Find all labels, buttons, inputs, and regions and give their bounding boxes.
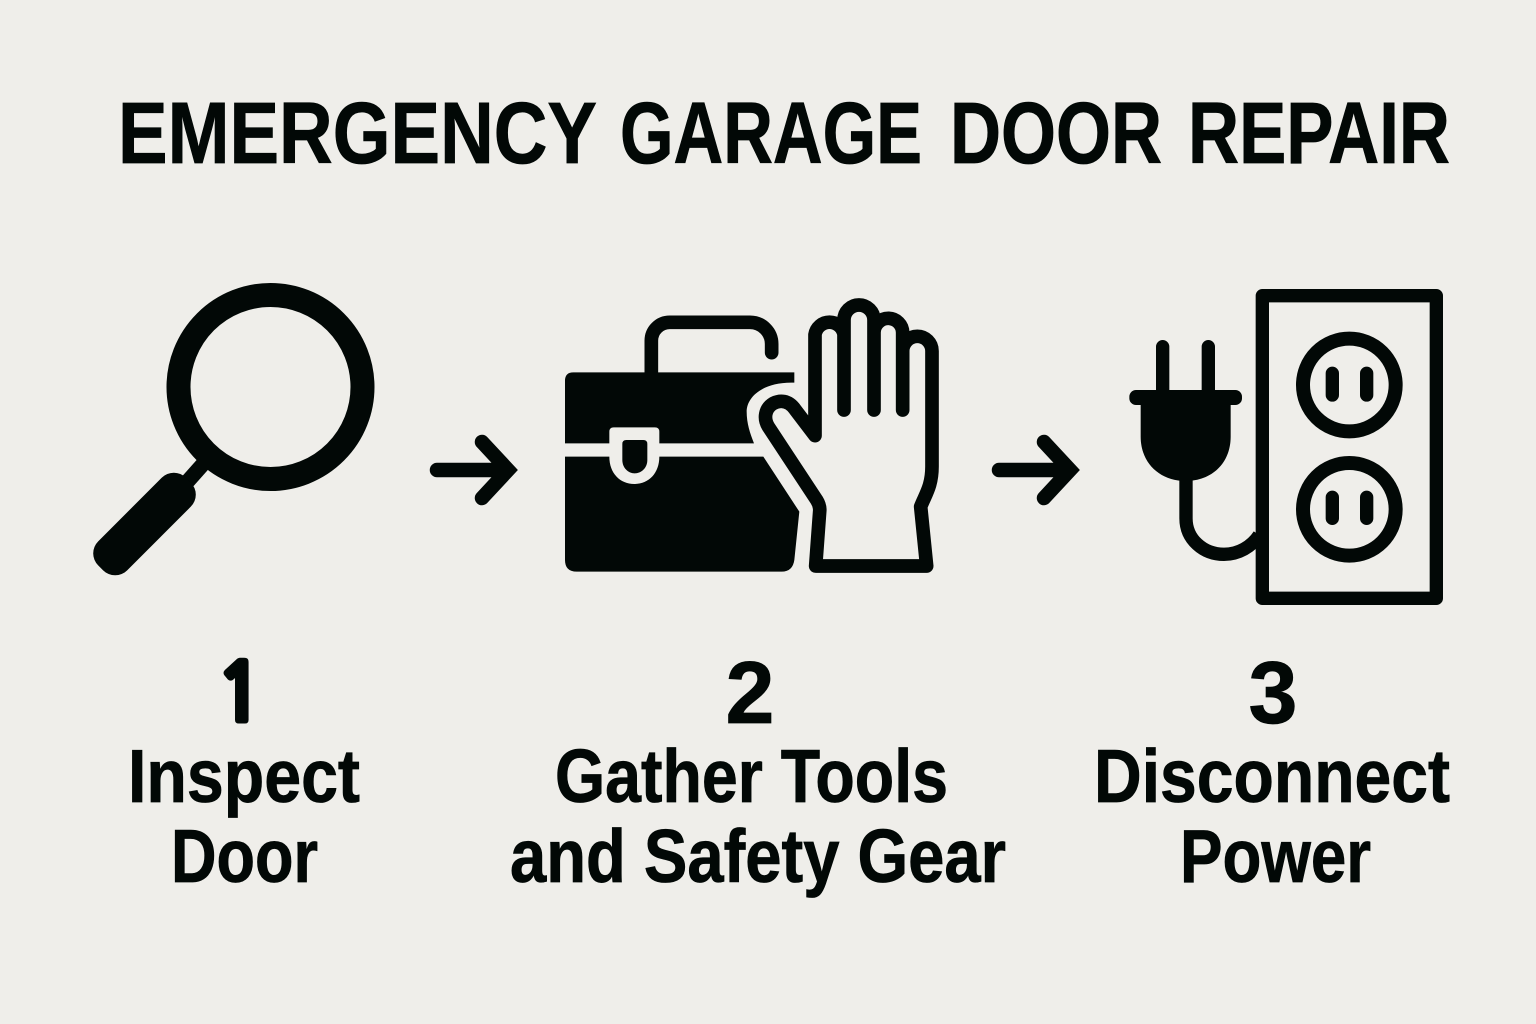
step 3 label: 3 (1249, 643, 1297, 742)
icon: magnifying glass (86, 295, 362, 582)
icon: toolbox and safety glove (565, 305, 932, 572)
upper socket (1303, 339, 1396, 431)
toolbox upper body (565, 372, 794, 443)
step 1 label (128, 654, 360, 898)
step 1 label: Door (171, 814, 318, 898)
arrow: step 1 to step 2 (437, 442, 508, 498)
title: REPAIR (1188, 85, 1450, 182)
toolbox clasp (622, 440, 647, 473)
step 2 label (510, 643, 1006, 898)
toolbox handle (651, 322, 772, 377)
step 1 label: Inspect (128, 734, 360, 818)
step 2 label: and Safety Gear (510, 814, 1006, 898)
title: GARAGE (620, 85, 922, 182)
toolbox lower body (565, 457, 799, 572)
safety glove (766, 305, 932, 566)
title (118, 85, 1450, 182)
step 2 label: 2 (726, 643, 774, 742)
arrow: step 2 to step 3 (999, 442, 1070, 498)
step 3 label: Power (1180, 814, 1371, 898)
plug (1129, 347, 1242, 481)
step 3 label: Disconnect (1094, 734, 1450, 818)
power cord (1186, 478, 1259, 554)
lower socket (1303, 463, 1396, 556)
wall plate (1262, 296, 1436, 598)
step 3 label (1094, 643, 1450, 898)
title: EMERGENCY (118, 85, 597, 182)
step 2 label: Gather Tools (555, 734, 948, 818)
step 1 label: 1 (216, 654, 264, 733)
title: DOOR (950, 85, 1162, 182)
icon: plug and wall outlet (1129, 296, 1436, 598)
